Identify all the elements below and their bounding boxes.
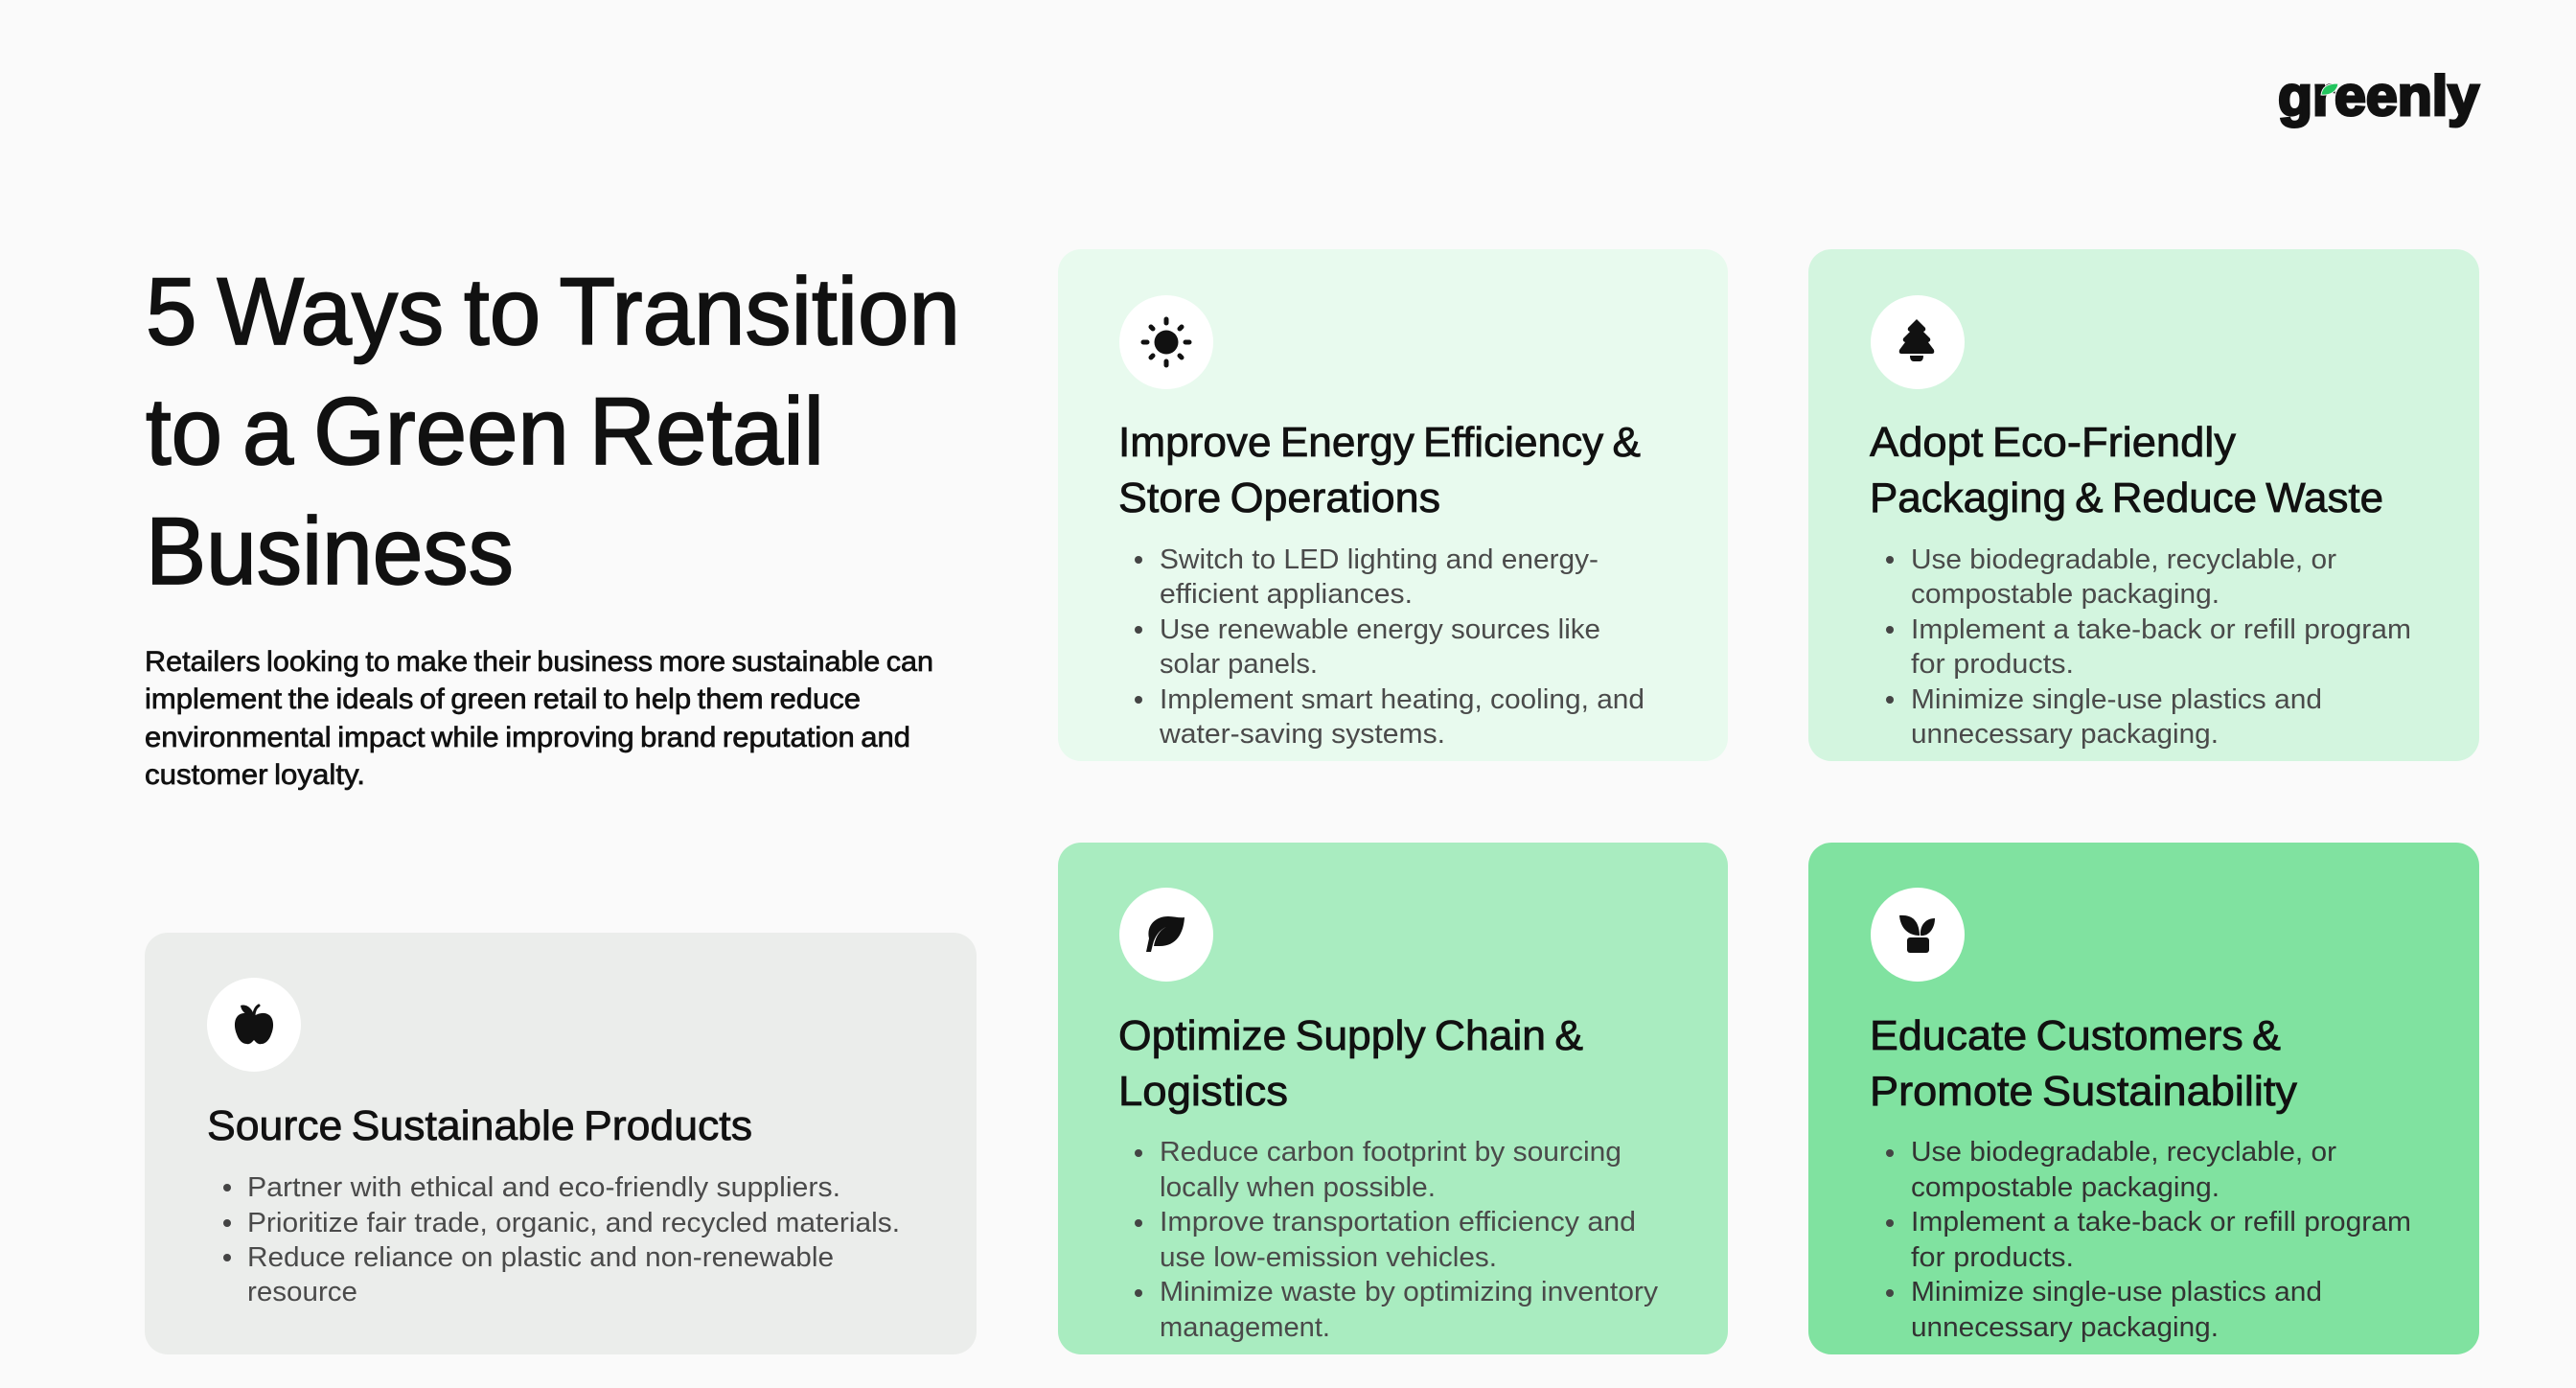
intro text bbox=[145, 646, 933, 791]
icon: apple bbox=[207, 978, 301, 1072]
heading: Store Operations bbox=[1118, 474, 1440, 521]
bullet list: unnecessary packaging. bbox=[1911, 1312, 2219, 1343]
bullet list: compostable packaging. bbox=[1911, 579, 2220, 610]
bullet list: Minimize single-use plastics and bbox=[1911, 1277, 2322, 1307]
bullet list: Improve transportation efficiency and bbox=[1160, 1207, 1636, 1238]
heading bbox=[1118, 1012, 1583, 1115]
panel: source sustainable products bbox=[145, 933, 977, 1354]
title bbox=[146, 258, 960, 604]
heading: Logistics bbox=[1118, 1068, 1288, 1115]
bullet list: compostable packaging. bbox=[1911, 1172, 2220, 1203]
bullet list: efficient appliances. bbox=[1160, 579, 1413, 610]
bullet list: Minimize single-use plastics and bbox=[1911, 684, 2322, 715]
icon: sun bbox=[1119, 295, 1213, 389]
bullet list: Switch to LED lighting and energy- bbox=[1160, 544, 1598, 575]
bullet list: Prioritize fair trade, organic, and recycled materials. bbox=[247, 1208, 900, 1238]
icon: leaf bbox=[1119, 888, 1213, 982]
bullet list: Use biodegradable, recyclable, or bbox=[1911, 1137, 2336, 1168]
bullet list: for products. bbox=[1911, 1242, 2074, 1273]
panel: optimize supply chain bbox=[1058, 843, 1728, 1354]
heading: Improve Energy Efficiency & bbox=[1118, 419, 1641, 466]
heading bbox=[1870, 1012, 2297, 1115]
bullet list: Implement a take-back or refill program bbox=[1911, 614, 2411, 645]
bullet list bbox=[1135, 1137, 1659, 1343]
bullet list bbox=[1135, 544, 1644, 750]
bullet list: water-saving systems. bbox=[1159, 719, 1445, 750]
logo: greenly: greenly bbox=[2278, 65, 2479, 127]
bullet list: Use biodegradable, recyclable, or bbox=[1911, 544, 2336, 575]
panel: improve energy efficiency bbox=[1058, 249, 1728, 761]
bullet list: resource bbox=[247, 1277, 357, 1307]
icon: potted plant bbox=[1871, 888, 1965, 982]
bullet list: unnecessary packaging. bbox=[1911, 719, 2219, 750]
heading: Optimize Supply Chain & bbox=[1118, 1012, 1583, 1059]
heading: Source Sustainable Products bbox=[207, 1102, 752, 1149]
bullet list bbox=[1886, 1137, 2411, 1343]
bullet list: use low-emission vehicles. bbox=[1160, 1242, 1497, 1273]
bullet list: Partner with ethical and eco-friendly suppliers. bbox=[247, 1172, 840, 1203]
intro text: environmental impact while improving brand reputation and bbox=[145, 722, 910, 753]
heading: Educate Customers & bbox=[1870, 1012, 2281, 1059]
bullet list: management. bbox=[1160, 1312, 1330, 1343]
bullet list bbox=[223, 1172, 900, 1307]
bullet list: Reduce reliance on plastic and non-renewable bbox=[247, 1242, 834, 1273]
intro text: customer loyalty. bbox=[145, 759, 365, 791]
bullet list: Use renewable energy sources like bbox=[1160, 614, 1600, 645]
title: to a Green Retail bbox=[146, 378, 824, 484]
bullet list bbox=[1886, 544, 2411, 750]
panel: eco-friendly packaging bbox=[1808, 249, 2479, 761]
intro text: Retailers looking to make their business more sustainable can bbox=[145, 646, 933, 678]
bullet list: Implement smart heating, cooling, and bbox=[1160, 684, 1644, 715]
heading bbox=[1870, 419, 2383, 521]
bullet list: Reduce carbon footprint by sourcing bbox=[1160, 1137, 1622, 1168]
bullet list: for products. bbox=[1911, 649, 2074, 680]
bullet list: Implement a take-back or refill program bbox=[1911, 1207, 2411, 1238]
heading: Promote Sustainability bbox=[1870, 1068, 2297, 1115]
heading bbox=[1118, 419, 1641, 521]
bullet list: Minimize waste by optimizing inventory bbox=[1160, 1277, 1659, 1307]
icon: tree bbox=[1871, 295, 1965, 389]
title: 5 Ways to Transition bbox=[146, 258, 960, 364]
heading: Packaging & Reduce Waste bbox=[1870, 474, 2383, 521]
intro text: implement the ideals of green retail to help them reduce bbox=[145, 683, 861, 715]
heading: Adopt Eco-Friendly bbox=[1870, 419, 2236, 466]
title: Business bbox=[146, 497, 514, 604]
bullet list: locally when possible. bbox=[1160, 1172, 1436, 1203]
panel: educate customers bbox=[1808, 843, 2479, 1354]
bullet list: solar panels. bbox=[1160, 649, 1318, 680]
